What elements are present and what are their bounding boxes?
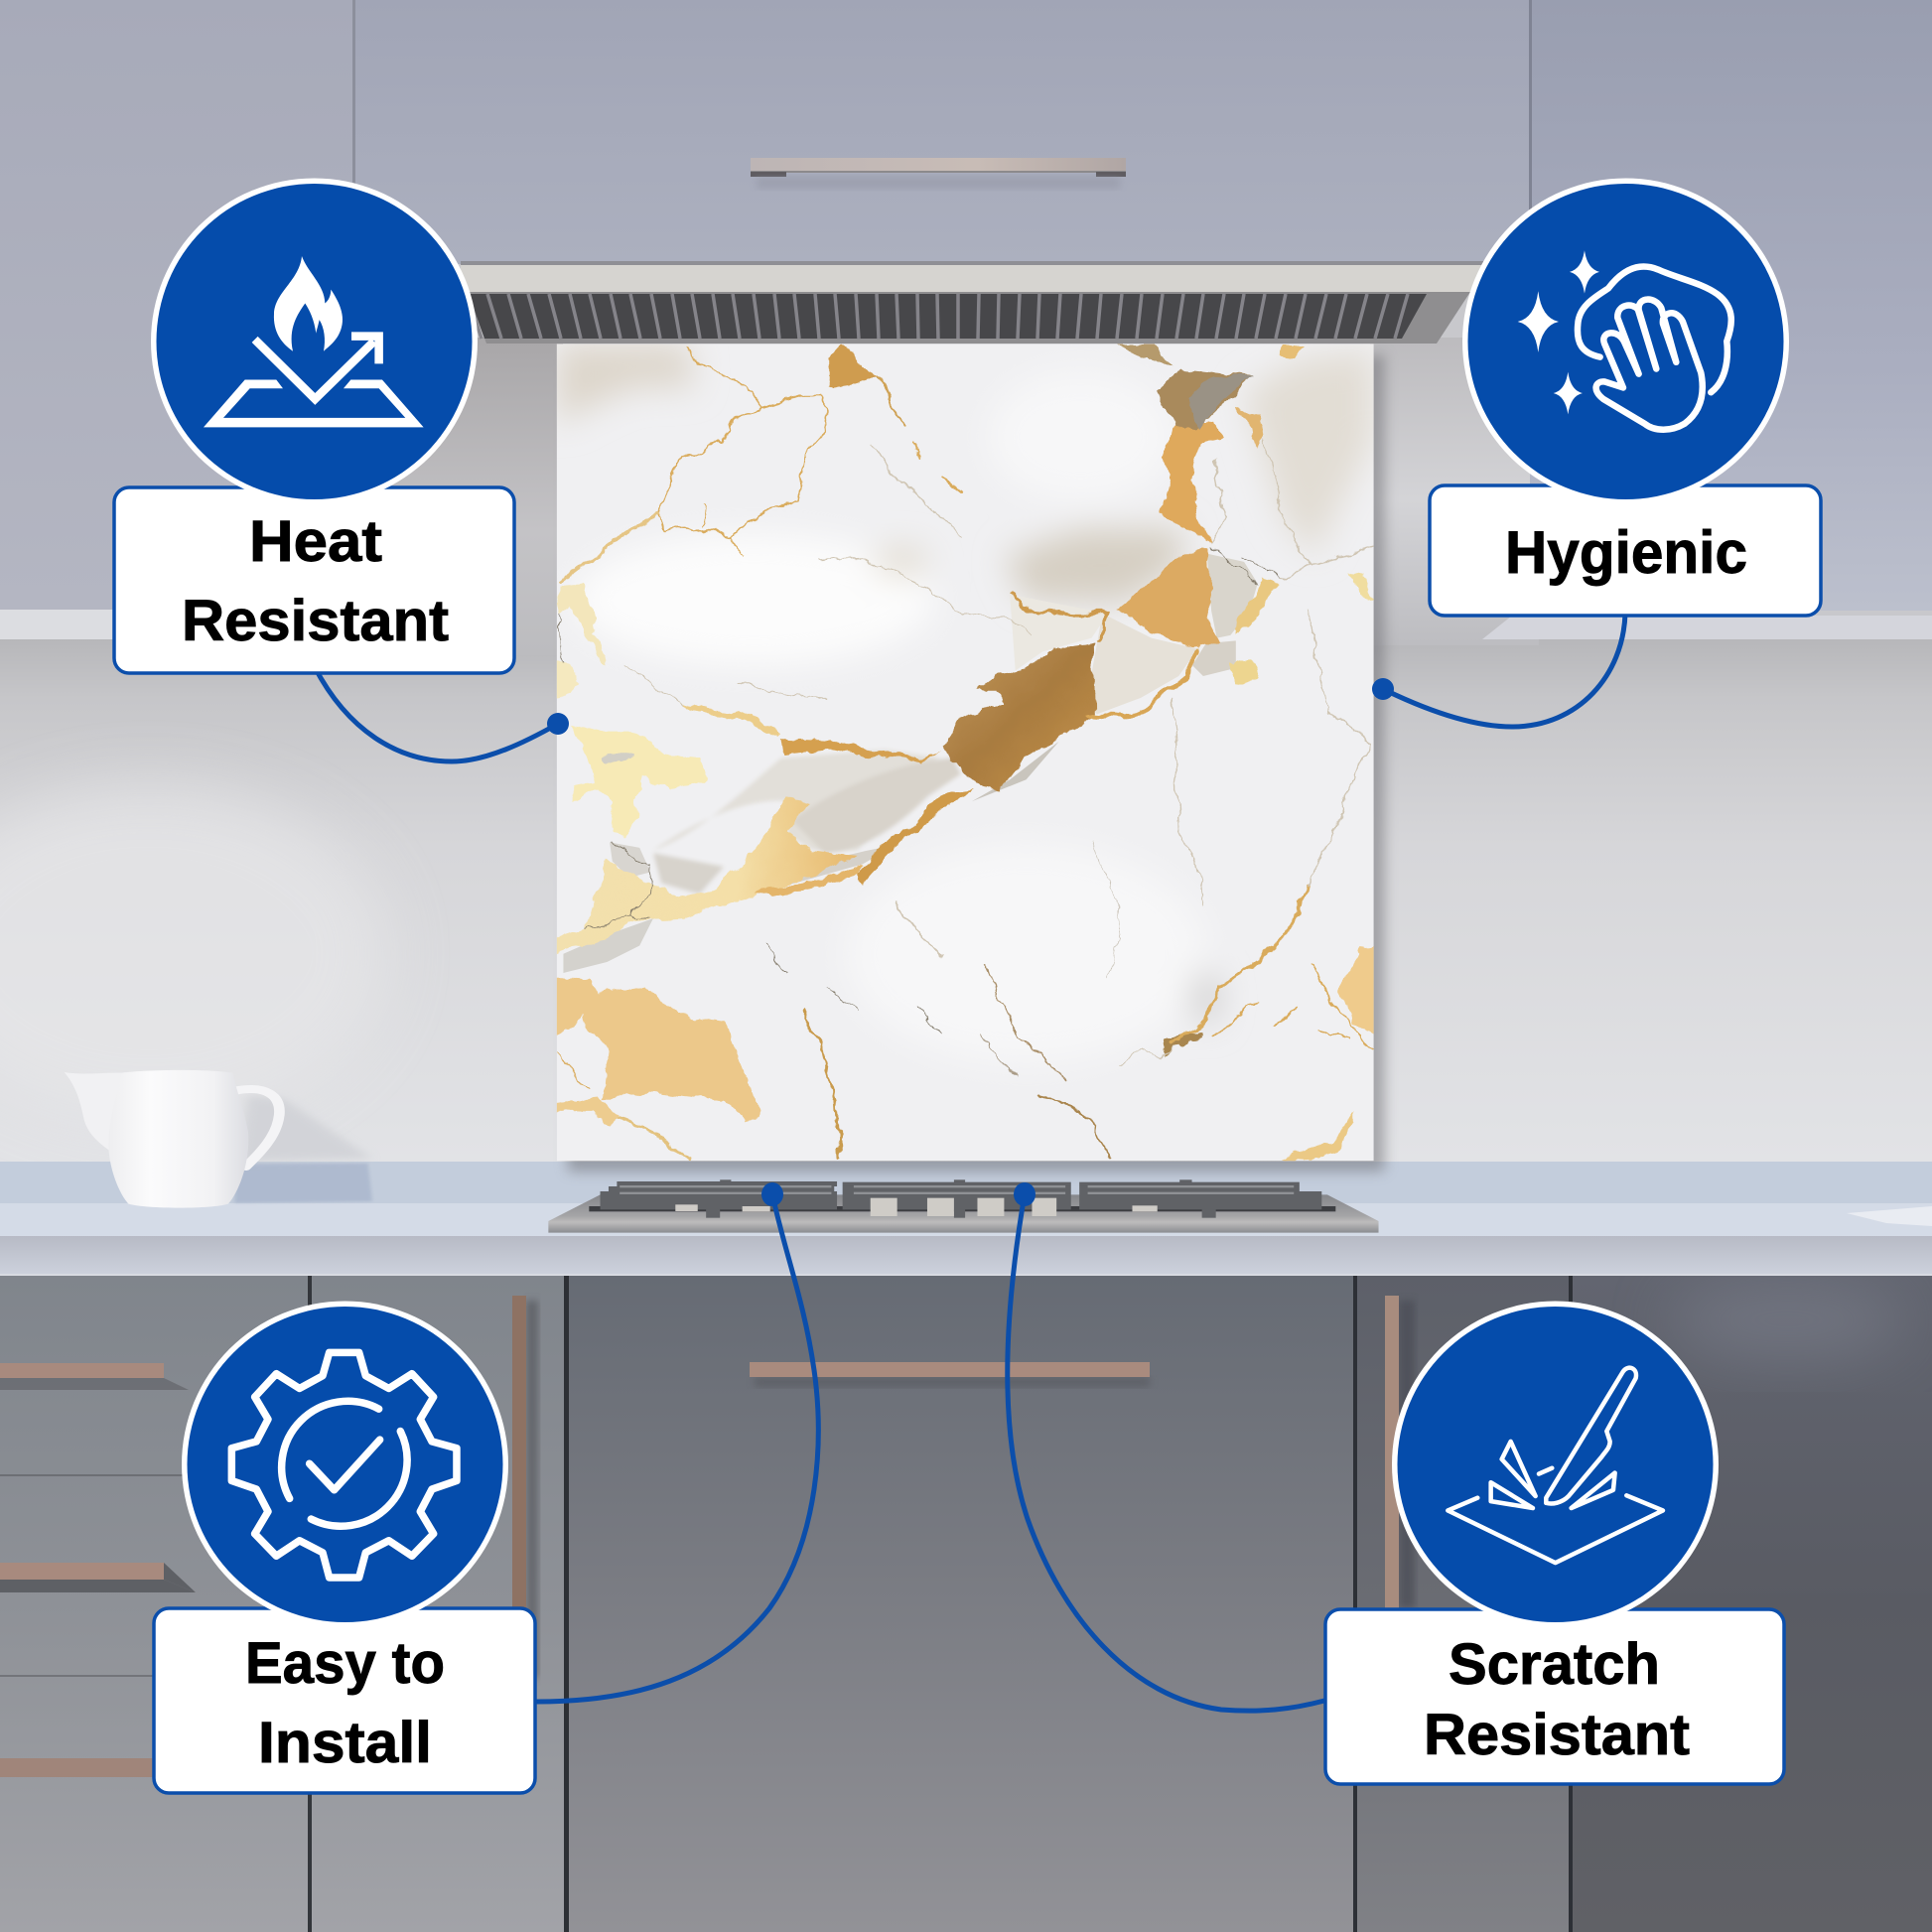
label text: easy to install <box>245 1631 445 1775</box>
label text: scratch resistant: Scratch <box>1449 1632 1660 1697</box>
badge: easy to install <box>182 1301 508 1628</box>
connector: easy to install <box>537 1182 818 1702</box>
feature: hygienic <box>1430 179 1821 616</box>
badge: heat resistant <box>151 179 478 504</box>
label text: easy to install: Easy to <box>245 1631 445 1696</box>
connector: hygienic <box>1372 614 1625 727</box>
badge: hygienic <box>1462 179 1789 504</box>
cabinet handles <box>0 1296 1415 1777</box>
label box: heat resistant <box>114 487 514 673</box>
gold deposits <box>942 640 1097 790</box>
connector: scratch resistant <box>1008 1182 1324 1711</box>
gold veins <box>558 346 1374 1158</box>
label box: scratch resistant <box>1325 1609 1784 1784</box>
soft grey shading <box>557 344 1374 1062</box>
hob <box>548 1179 1379 1233</box>
label text: easy to install: Install <box>258 1711 432 1775</box>
feature: heat resistant <box>114 179 514 673</box>
extractor hood <box>461 261 1483 344</box>
label text: heat resistant: Resistant <box>182 589 449 653</box>
lower cabinets <box>0 1276 1932 1932</box>
label text: hygienic: Hygienic <box>1505 519 1747 586</box>
teapot <box>65 1070 372 1208</box>
label text: scratch resistant: Resistant <box>1424 1703 1690 1767</box>
countertop <box>0 1162 1932 1276</box>
upper cabinets <box>0 0 1932 639</box>
feature: easy to install <box>154 1301 535 1793</box>
label box: hygienic <box>1430 485 1821 616</box>
label text: scratch resistant <box>1424 1632 1690 1767</box>
label box: easy to install <box>154 1608 535 1793</box>
wall cabinet handle <box>751 158 1126 189</box>
label text: heat resistant: Heat <box>249 509 382 574</box>
badge: scratch resistant <box>1392 1301 1719 1628</box>
feature: scratch resistant <box>1325 1301 1784 1784</box>
label text: heat resistant <box>182 509 449 653</box>
fine tan veins <box>628 442 1374 1082</box>
connector: heat resistant <box>315 667 569 761</box>
marble splashback panel <box>552 344 1385 1172</box>
